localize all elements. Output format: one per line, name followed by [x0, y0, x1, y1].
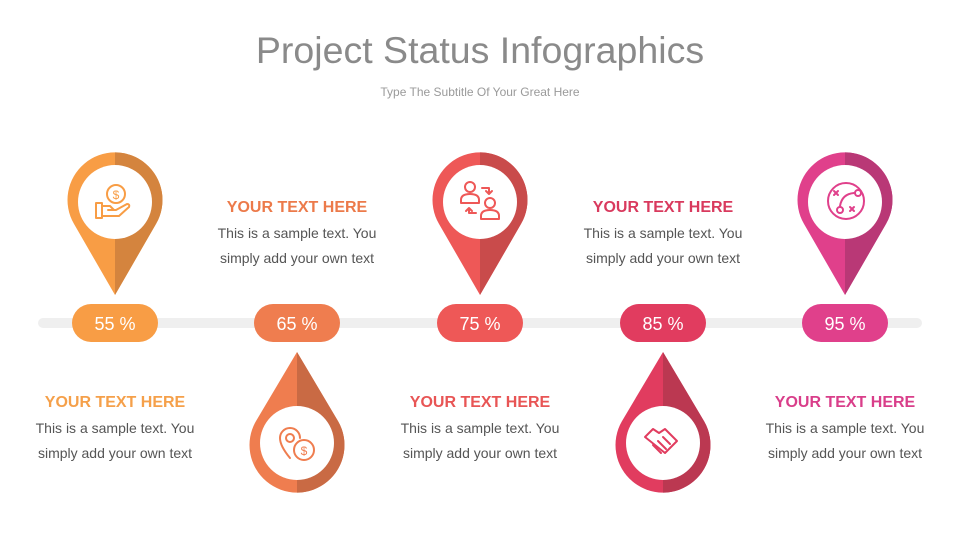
icon: people exchange: [461, 182, 499, 219]
icon: handshake: [645, 429, 677, 453]
text block 65 (top): simply add your own text: [220, 250, 374, 266]
text block 95 (bottom): YOUR TEXT HERE: [775, 394, 916, 411]
text block 85 (top): YOUR TEXT HERE: [593, 199, 734, 216]
text block 65 (top): [218, 199, 376, 266]
pill 95: 95 %: [824, 314, 866, 334]
text block 55 (bottom): YOUR TEXT HERE: [45, 394, 186, 411]
pill 75: [437, 304, 523, 342]
pill 95: [802, 304, 888, 342]
pin 5 (top, pink): [798, 152, 893, 295]
text block 75 (bottom): [401, 394, 559, 461]
text block 75 (bottom): simply add your own text: [403, 445, 557, 461]
text block 85 (top): [584, 199, 742, 266]
icon: location with dollar: [280, 428, 314, 460]
pill 65: 65 %: [276, 314, 318, 334]
text block 95 (bottom): This is a sample text. You: [766, 420, 924, 436]
subtitle: Type The Subtitle Of Your Great Here: [380, 85, 580, 99]
icon: hand with coin: [96, 185, 129, 218]
text block 65 (top): This is a sample text. You: [218, 225, 376, 241]
text block 85 (top): This is a sample text. You: [584, 225, 742, 241]
text block 65 (top): YOUR TEXT HERE: [227, 199, 368, 216]
text block 55 (bottom): simply add your own text: [38, 445, 192, 461]
icon: hand with coin: $: [113, 188, 120, 202]
pill 55: 55 %: [94, 314, 136, 334]
text block 75 (bottom): YOUR TEXT HERE: [410, 394, 551, 411]
pin 3 (top, red): [432, 152, 528, 295]
pill 75: 75 %: [459, 314, 501, 334]
text block 85 (top): simply add your own text: [586, 250, 740, 266]
text block 95 (bottom): [766, 394, 924, 461]
text block 75 (bottom): This is a sample text. You: [401, 420, 559, 436]
icon: location with dollar: $: [301, 444, 308, 458]
icon: strategy: [828, 183, 864, 219]
pin 2 (bottom, coral): [250, 352, 345, 493]
pill 85: [620, 304, 706, 342]
pin 4 (bottom, crimson): [616, 352, 710, 493]
pill 65: [254, 304, 340, 342]
text block 55 (bottom): This is a sample text. You: [36, 420, 194, 436]
pill 55: [72, 304, 158, 342]
pin 1 (top, orange): [68, 152, 162, 295]
title: Project Status Infographics: [256, 29, 704, 71]
text block 95 (bottom): simply add your own text: [768, 445, 922, 461]
pill 85: 85 %: [642, 314, 684, 334]
timeline bar: [38, 318, 922, 328]
text block 55 (bottom): [36, 394, 194, 461]
